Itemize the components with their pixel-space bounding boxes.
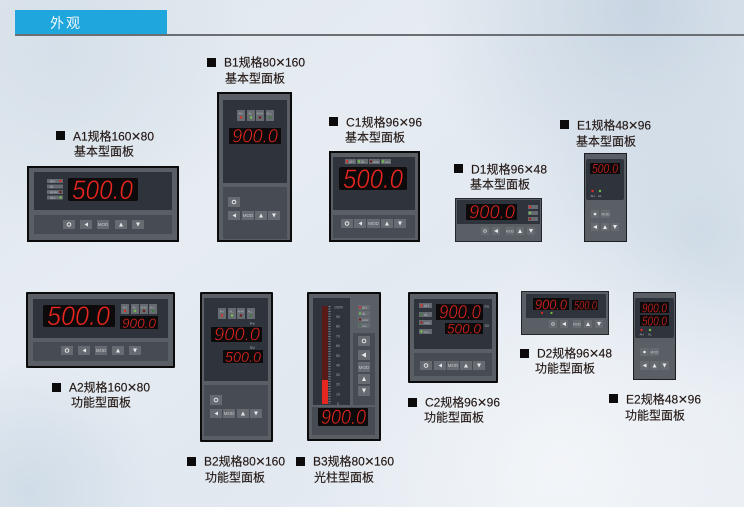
bar scale: 20 xyxy=(336,382,340,386)
panel: C1 xyxy=(329,151,420,242)
label: D2: D2规格96 xyxy=(537,346,589,360)
label: B3: 160 xyxy=(374,454,394,468)
indicators: C1 xyxy=(345,159,391,164)
label: A1: 80 xyxy=(141,130,154,144)
bar scale: 30 xyxy=(336,373,340,377)
display: D1: 900.0 xyxy=(469,202,515,224)
label: D1: × xyxy=(524,162,533,178)
label: B2 xyxy=(187,454,285,484)
label: C2: × xyxy=(477,394,487,412)
panel: C2 xyxy=(408,292,498,383)
indicators: E2 xyxy=(640,329,652,336)
bar scale: 70 xyxy=(336,334,340,338)
buttons: A1 xyxy=(63,220,144,229)
buttons: B2 xyxy=(210,395,262,418)
indicators: C2: AL xyxy=(424,313,428,317)
indicators: A2: AL xyxy=(132,306,137,310)
label: C1: × xyxy=(399,114,408,132)
indicators: B2 xyxy=(218,308,255,350)
label: E2: 功能型面板 xyxy=(625,408,685,422)
bar scale: 0 xyxy=(337,402,339,406)
label: B2: × xyxy=(256,454,265,470)
buttons: D2: MOD xyxy=(573,322,582,326)
label: A2 xyxy=(52,380,150,410)
label: C2: 功能型面板 xyxy=(424,410,484,424)
display: D2 main: 900.0 xyxy=(535,298,567,314)
label: D2: 48 xyxy=(599,346,612,360)
label: E1: E1规格48 xyxy=(577,118,629,132)
buttons: B3: MOD xyxy=(359,365,370,370)
indicators: C2 xyxy=(419,303,490,334)
label: A2: 功能型面板 xyxy=(71,396,131,410)
label: E1: × xyxy=(628,118,638,134)
indicators: A1 xyxy=(47,179,63,200)
label: E1: 基本型面板 xyxy=(576,134,636,148)
indicators: D2 xyxy=(541,312,553,314)
label: A1: 基本型面板 xyxy=(74,144,134,158)
bar scale: 100% xyxy=(334,306,343,310)
bar scale xyxy=(334,306,343,406)
bar scale: 90 xyxy=(336,315,340,319)
buttons: C1: MOD xyxy=(368,221,379,226)
buttons: D1: MOD xyxy=(506,230,515,234)
indicators: E2: AH xyxy=(640,332,644,336)
indicators: C2: PV xyxy=(484,305,490,309)
indicators: B1: AH xyxy=(238,112,243,116)
indicators: A1: ALL xyxy=(50,196,56,200)
bar scale: 50 xyxy=(336,354,340,358)
display: B3: 900.0 xyxy=(321,406,366,429)
indicators: B3: ALL xyxy=(362,324,368,328)
label: B1: × xyxy=(276,54,285,72)
display: D2 secondary: 500.0 xyxy=(574,298,597,312)
buttons: E2: MOD xyxy=(650,350,659,354)
label: D1: 48 xyxy=(534,162,547,176)
display: E1: 500.0 xyxy=(592,161,619,176)
display: E2 top: 900.0 xyxy=(642,300,668,316)
display: B1: 900.0 xyxy=(232,126,278,148)
display: B2 secondary: 500.0 xyxy=(225,350,261,366)
panel: B2 xyxy=(200,292,273,442)
label: B3: 光柱型面板 xyxy=(314,470,374,484)
indicators: A1: AH xyxy=(50,179,55,183)
label: D2: 功能型面板 xyxy=(535,362,595,376)
indicators: B1 xyxy=(237,110,274,121)
indicators: E1: AH xyxy=(590,194,595,198)
label: C1: 基本型面板 xyxy=(345,130,405,144)
label: B3: B3规格80 xyxy=(313,454,365,468)
indicators: A2: AHH xyxy=(140,306,147,310)
indicators: C2: AHH xyxy=(424,321,430,325)
section header: 外观 xyxy=(50,15,82,31)
display: A2 secondary: 900.0 xyxy=(122,315,156,331)
label: A1: A1规格160 xyxy=(73,130,131,144)
label: B2: B2规格80 xyxy=(204,454,256,468)
indicators: B1: AL xyxy=(248,112,253,116)
display: B2 main: 900.0 xyxy=(214,324,260,344)
display: C2 secondary: 500.0 xyxy=(447,320,481,336)
indicators: B3: AL xyxy=(362,312,366,316)
indicators: B2: AHH xyxy=(238,310,244,314)
indicators: A1: AL xyxy=(50,185,54,189)
panel: E1 xyxy=(584,153,627,242)
label: E1 xyxy=(560,118,651,148)
indicators: A2: ALL xyxy=(150,306,155,310)
bar scale: 40 xyxy=(336,364,340,368)
display: A1: 500.0 xyxy=(72,175,133,205)
label: D1: 基本型面板 xyxy=(470,178,530,192)
display: C1: 500.0 xyxy=(343,164,403,194)
panel: E2 xyxy=(633,292,676,380)
display: A2 main: 500.0 xyxy=(47,301,110,331)
label: B2: 功能型面板 xyxy=(205,470,265,484)
section header xyxy=(15,10,744,36)
indicators: E1: AL xyxy=(598,194,602,198)
indicators: B1: AHH xyxy=(256,112,263,116)
label: C2 xyxy=(408,394,500,424)
indicators: B3 xyxy=(358,305,370,328)
indicators: C2: ALL xyxy=(424,330,430,334)
buttons: A2 xyxy=(61,346,141,355)
buttons: B2: MOD xyxy=(224,411,235,416)
label: A2: 80 xyxy=(137,380,150,394)
indicators: B2: ALL xyxy=(248,310,253,314)
label: D2: × xyxy=(589,346,599,362)
indicators: B2: SV xyxy=(250,346,255,350)
label: C2: 96 xyxy=(487,396,500,410)
panel: B1 xyxy=(217,92,292,242)
label: B3: × xyxy=(365,454,374,470)
buttons: C2: MOD xyxy=(448,363,459,368)
label: B3 xyxy=(296,454,394,484)
indicators: A2 xyxy=(121,304,157,314)
buttons: B1: MOD xyxy=(243,213,254,218)
label: E2: E2规格48 xyxy=(626,392,678,406)
label: C1: C1规格96 xyxy=(346,116,399,130)
indicators: B1: ALL xyxy=(266,112,272,116)
label: B1: 基本型面板 xyxy=(225,72,285,86)
label: E1: 96 xyxy=(638,118,651,132)
buttons: E1: MOD xyxy=(601,212,610,216)
indicators: C2: SV xyxy=(484,324,490,328)
indicators: D1 xyxy=(528,205,538,221)
label: B1 xyxy=(207,54,305,86)
label: A1 xyxy=(56,128,154,158)
bar scale: 10 xyxy=(336,392,340,396)
label: E2 xyxy=(609,392,701,422)
bar scale: 80 xyxy=(336,324,340,328)
label: B1: B1规格80 xyxy=(224,56,276,70)
indicators: E1 xyxy=(590,190,602,198)
label: A2: A2规格160 xyxy=(69,380,127,394)
bar scale: 60 xyxy=(336,344,340,348)
label: D1: D1规格96 xyxy=(471,162,524,176)
panel: D1 xyxy=(455,198,542,242)
indicators: B3: AHH xyxy=(362,318,368,322)
display: C2 main: 900.0 xyxy=(439,302,481,324)
indicators: B2: PV xyxy=(250,322,255,326)
indicators: E2: AL xyxy=(648,332,652,336)
label: C1 xyxy=(329,114,422,144)
indicators: C1: ALL xyxy=(385,160,391,164)
label: B1: 160 xyxy=(285,56,305,70)
buttons: B1 xyxy=(228,197,280,220)
label: C2: C2规格96 xyxy=(425,396,477,410)
label: A2: × xyxy=(127,380,137,396)
label: D2 xyxy=(520,346,612,376)
indicators: A2: AH xyxy=(122,306,127,310)
panel: B3 xyxy=(307,292,381,441)
indicators: B2: AL xyxy=(230,310,234,314)
indicators: B2: AH xyxy=(220,310,224,314)
label: E2: 96 xyxy=(688,392,701,406)
buttons: A2: MOD xyxy=(96,348,107,353)
indicators: C1: AHH xyxy=(373,160,379,164)
indicators: A1: AHH xyxy=(50,190,58,194)
label: B2: 160 xyxy=(265,454,285,468)
panel: D2 xyxy=(521,291,609,335)
indicators: C2: AH xyxy=(424,304,429,308)
indicators: B3: AH xyxy=(362,306,367,310)
bar graph xyxy=(322,306,330,404)
panel: A2 xyxy=(26,292,175,368)
label: C1: 96 xyxy=(409,116,422,130)
display: E2 bottom: 500.0 xyxy=(642,314,668,328)
panel: A1 xyxy=(27,166,179,242)
indicators: C1: AH xyxy=(349,160,354,164)
label: E2: × xyxy=(678,392,688,408)
buttons: A1: MOD xyxy=(98,222,109,227)
label: D1 xyxy=(454,162,547,192)
label: A1: × xyxy=(131,128,141,146)
indicators: C1: AL xyxy=(361,160,365,164)
buttons: B3 xyxy=(358,336,370,396)
